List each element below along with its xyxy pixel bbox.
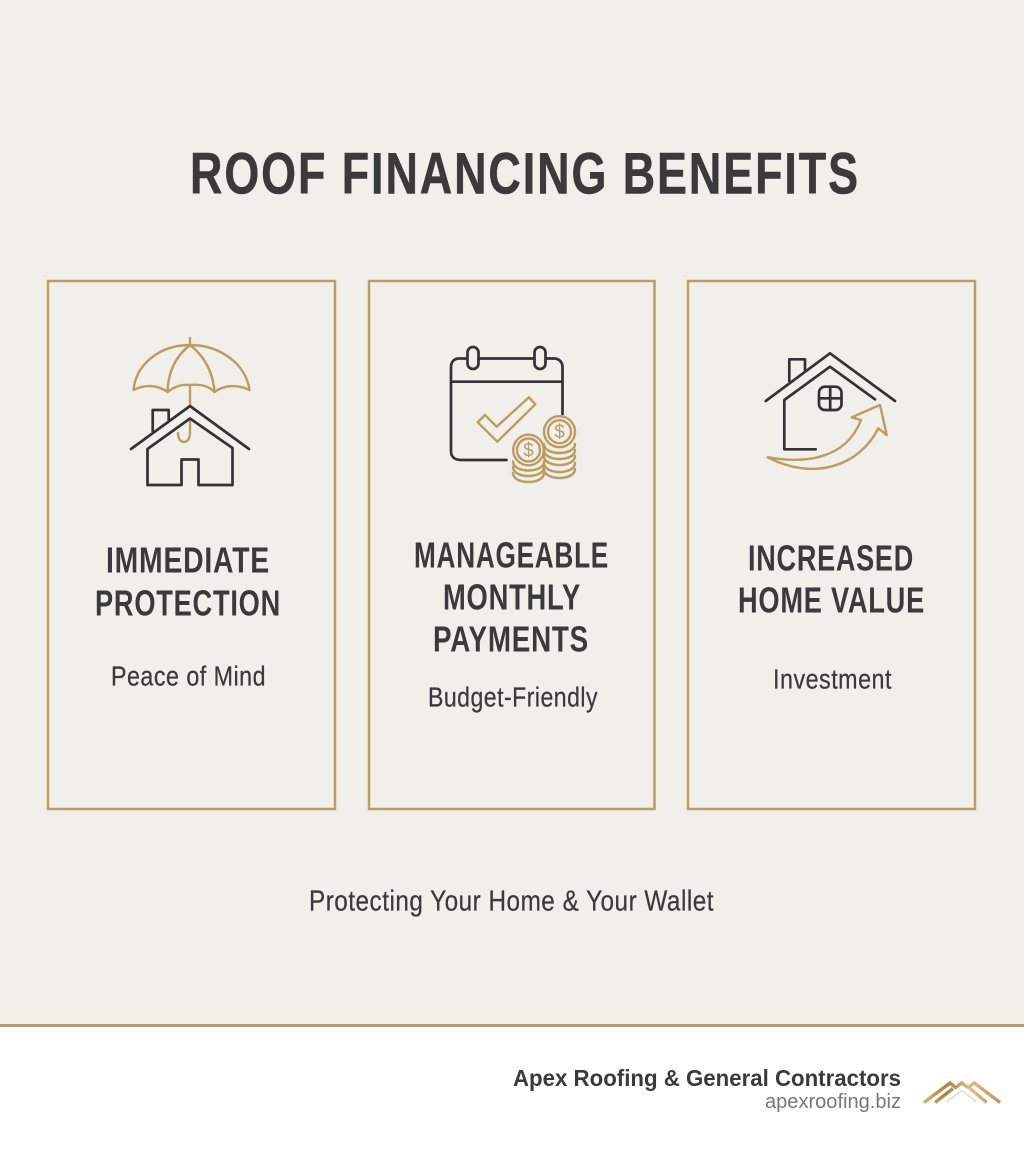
heading: HOME VALUE [738, 580, 925, 620]
heading: PROTECTION [95, 582, 281, 624]
subtitle: Peace of Mind [111, 660, 266, 692]
heading: MONTHLY [443, 576, 581, 618]
heading: IMMEDIATE [106, 540, 270, 580]
website: apexroofing.biz [765, 1091, 901, 1113]
panel: immediate protection [48, 281, 335, 809]
heading [95, 540, 281, 624]
heading: PAYMENTS [433, 618, 589, 660]
panel: increased home value [688, 281, 975, 809]
heading: INCREASED [748, 538, 914, 578]
subtitle: Investment [773, 664, 892, 694]
icon: umbrella over house [131, 338, 250, 485]
company name: Apex Roofing & General Contractors [513, 1065, 901, 1091]
footer band [0, 1024, 1024, 1154]
heading [414, 534, 609, 660]
icon: house with rising arrow [766, 353, 895, 469]
icon: logo roof peaks [924, 1083, 1000, 1102]
tagline: Protecting Your Home & Your Wallet [309, 886, 714, 918]
heading [738, 538, 925, 620]
subtitle: Budget-Friendly [428, 682, 598, 712]
icon: calendar with coins: $ [554, 422, 565, 443]
panel: manageable monthly payments [369, 281, 654, 809]
icon: calendar with coins [451, 347, 575, 482]
heading: MANAGEABLE [414, 534, 609, 576]
icon: calendar with coins: $ [523, 440, 534, 462]
